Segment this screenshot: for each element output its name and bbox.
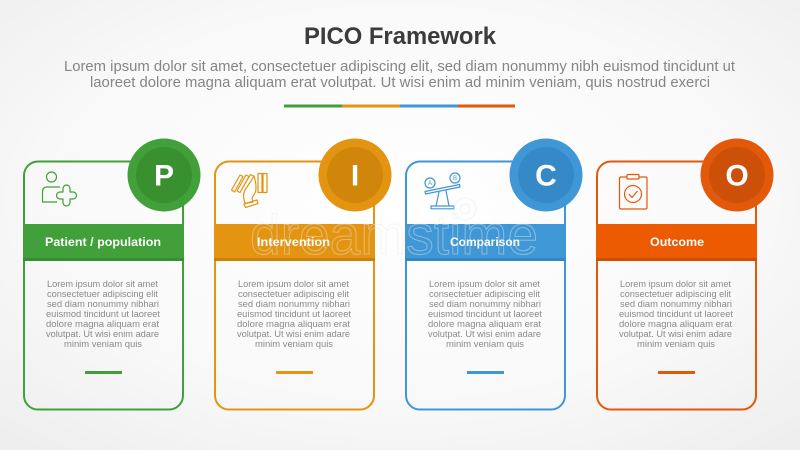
- body text: euismod tincidunt ut laoreet: [237, 309, 351, 319]
- heading band: [214, 224, 375, 261]
- heading band: Patient / population: [45, 235, 161, 249]
- body text: volutpat. Ut wisi enim adare: [46, 329, 159, 339]
- body text: consectetuer adipiscing elit: [620, 289, 731, 299]
- body text: dolore magna aliquam erat: [428, 319, 541, 329]
- title: PICO Framework: [304, 23, 497, 50]
- intro text: laoreet dolore magna aliquam erat volutpat. Ut wisi enim ad minim veniam, quis nostrud exerci: [90, 75, 710, 91]
- body text: Lorem ipsum dolor sit amet: [47, 279, 158, 289]
- intro text: Lorem ipsum dolor sit amet, consectetuer adipiscing elit, sed diam nonummy nibh euismod tincidunt ut: [64, 59, 735, 75]
- body text: consectetuer adipiscing elit: [429, 289, 540, 299]
- letter badge: [700, 138, 774, 212]
- body text: euismod tincidunt ut laoreet: [46, 309, 160, 319]
- body text: minim veniam quis: [64, 339, 142, 349]
- body text: [46, 279, 160, 349]
- body text: sed diam nonummy nibhari: [238, 299, 350, 309]
- colored divider: [284, 104, 515, 108]
- body text: dolore magna aliquam erat: [237, 319, 350, 329]
- icon: clipboard with check: [620, 174, 647, 209]
- body text: volutpat. Ut wisi enim adare: [428, 329, 541, 339]
- accent line: [467, 371, 504, 374]
- heading band: Comparison: [450, 235, 520, 249]
- body text: consectetuer adipiscing elit: [47, 289, 158, 299]
- letter badge: [318, 138, 392, 212]
- icon: balance scale: A: [428, 181, 432, 187]
- icon: balance scale: [425, 173, 460, 209]
- body text: consectetuer adipiscing elit: [238, 289, 349, 299]
- accent line: [85, 371, 122, 374]
- body text: minim veniam quis: [255, 339, 333, 349]
- heading band: Intervention: [257, 235, 330, 249]
- panel: outcome: [596, 138, 774, 410]
- body text: volutpat. Ut wisi enim adare: [619, 329, 732, 339]
- body text: Lorem ipsum dolor sit amet: [429, 279, 540, 289]
- letter badge: O: [725, 160, 749, 192]
- body text: sed diam nonummy nibhari: [47, 299, 159, 309]
- panel: intervention: [214, 138, 392, 410]
- body text: [237, 279, 351, 349]
- accent line: [276, 371, 313, 374]
- body text: euismod tincidunt ut laoreet: [619, 309, 733, 319]
- body text: euismod tincidunt ut laoreet: [428, 309, 542, 319]
- letter badge: P: [154, 160, 174, 192]
- letter badge: I: [351, 160, 359, 192]
- panel: comparison: [405, 138, 582, 410]
- body text: [428, 279, 542, 349]
- watermark: dreamstime: [250, 203, 538, 266]
- intro text: [64, 59, 735, 91]
- body text: sed diam nonummy nibhari: [429, 299, 541, 309]
- icon: balance scale: B: [453, 176, 457, 182]
- body text: Lorem ipsum dolor sit amet: [620, 279, 731, 289]
- body text: Lorem ipsum dolor sit amet: [238, 279, 349, 289]
- letter badge: [128, 138, 200, 212]
- icon: hand with bars: [232, 174, 267, 208]
- body text: dolore magna aliquam erat: [619, 319, 732, 329]
- letter badge: [510, 138, 582, 212]
- heading band: [596, 224, 757, 261]
- icon: patient with plus: [42, 172, 76, 206]
- body text: [619, 279, 733, 349]
- heading band: [23, 224, 184, 261]
- body text: dolore magna aliquam erat: [46, 319, 159, 329]
- body text: minim veniam quis: [446, 339, 524, 349]
- heading band: [405, 224, 566, 261]
- heading band: Outcome: [650, 235, 704, 249]
- body text: sed diam nonummy nibhari: [620, 299, 732, 309]
- panel: patient / population: [23, 138, 200, 410]
- body text: volutpat. Ut wisi enim adare: [237, 329, 350, 339]
- body text: minim veniam quis: [637, 339, 715, 349]
- accent line: [658, 371, 695, 374]
- letter badge: C: [535, 160, 557, 192]
